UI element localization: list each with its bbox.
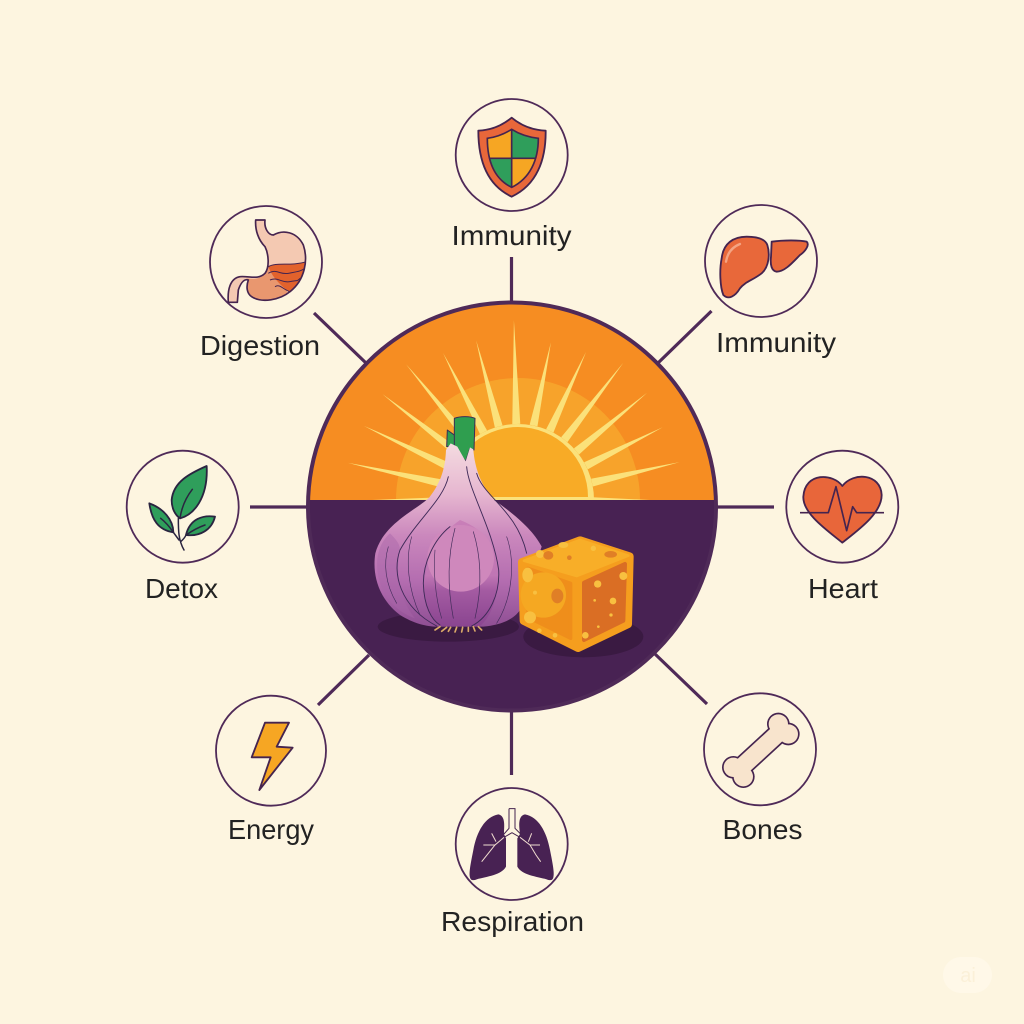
central medallion	[300, 295, 724, 715]
icon: lightning bolt	[252, 723, 293, 790]
node: Bones	[704, 693, 816, 845]
medallion background	[300, 295, 724, 715]
infographic canvas	[126, 98, 900, 937]
node: Detox	[127, 451, 239, 604]
label: Immunity	[716, 327, 836, 358]
label: Immunity	[452, 220, 572, 251]
cheese cube	[521, 540, 629, 648]
icon circle	[456, 99, 568, 211]
icon circle	[705, 205, 817, 317]
watermark badge	[943, 957, 992, 993]
node: Immunity shield	[452, 99, 572, 251]
icon circle	[704, 693, 816, 805]
label: Digestion	[200, 330, 320, 361]
sun with rays	[347, 320, 681, 500]
icon circle	[216, 696, 326, 806]
medallion ring	[308, 302, 716, 710]
label: Respiration	[441, 906, 584, 937]
icon: heart with pulse	[800, 477, 884, 543]
garlic bulb	[374, 443, 542, 627]
icon circle	[127, 451, 239, 563]
icon circle	[210, 206, 322, 318]
node: Digestion stomach	[200, 206, 322, 361]
label: Bones	[722, 814, 802, 845]
icon: bone	[722, 713, 800, 788]
shadows	[378, 612, 643, 657]
icon: liver	[720, 237, 808, 297]
node: Immunity liver	[705, 205, 836, 358]
label: Detox	[145, 573, 218, 604]
node: Respiration	[441, 788, 584, 937]
node: Heart	[786, 451, 898, 604]
icon circle	[786, 451, 898, 563]
node: Energy	[216, 696, 326, 845]
label: Heart	[808, 573, 878, 604]
garlic roots	[435, 627, 482, 632]
connector lines	[250, 257, 774, 775]
label: Energy	[228, 814, 314, 845]
icon circle	[456, 788, 568, 900]
icon: leaves	[149, 466, 215, 550]
icon: shield	[478, 118, 546, 197]
garlic and cube artwork	[374, 417, 643, 657]
icon: stomach	[228, 220, 307, 303]
icon: lungs	[470, 809, 554, 880]
watermark badge: ai	[960, 965, 976, 987]
garlic stem	[447, 417, 475, 461]
